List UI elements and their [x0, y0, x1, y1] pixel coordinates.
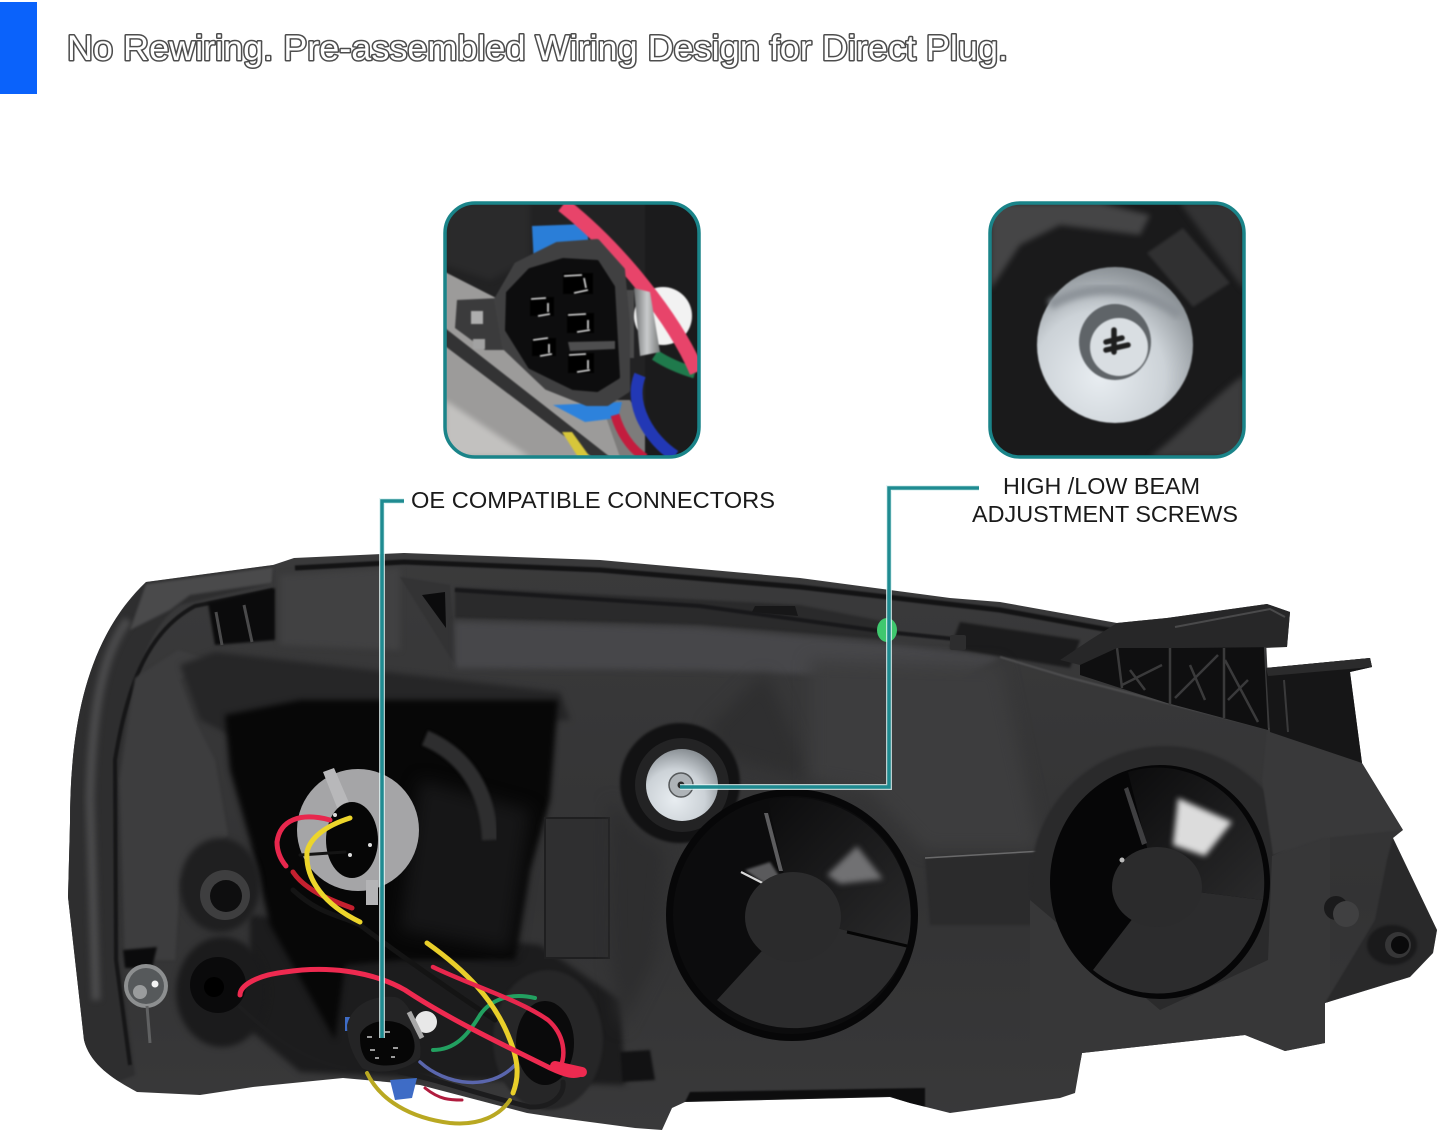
wiring harness: [240, 817, 583, 1123]
key rib: [568, 341, 615, 351]
upper left lighter housing: [990, 203, 1150, 290]
red wire lower: [615, 415, 645, 458]
adjustment screw boss: [620, 723, 740, 843]
harness connector: [345, 997, 437, 1100]
right projector lens: [1050, 765, 1270, 999]
title: No Rewiring. Pre-assembled Wiring Design for Direct Plug.: [67, 29, 1008, 68]
washer top shading: [1050, 290, 1180, 315]
screw recess: [1079, 304, 1151, 380]
dark diagonal band: [445, 328, 610, 457]
upper body highlight: [454, 622, 992, 674]
rear bracket rib: [1284, 680, 1288, 732]
dark block lower-left of lens: [620, 1050, 655, 1082]
blue wire: [637, 375, 675, 456]
green wire: [655, 355, 695, 373]
red socket wire: [277, 817, 330, 866]
pin contact marks: [531, 275, 590, 372]
lower step block: [926, 853, 1032, 924]
interior details clipped to housing: [60, 562, 1437, 1110]
rear bracket top plate: [1266, 658, 1372, 676]
top rail dark edge: [295, 562, 1120, 632]
step edge line: [925, 851, 1042, 858]
long red wire: [240, 969, 583, 1075]
mounting bracket with lattice: [1060, 604, 1372, 763]
connector shell: [497, 242, 627, 403]
callout line: connectors: [382, 501, 404, 1038]
connector side latch: [455, 298, 505, 350]
inner left panel: [123, 674, 226, 958]
slot ribs: [216, 605, 252, 645]
mid shading zone above recess: [180, 652, 568, 731]
clip base: [624, 290, 634, 358]
lower right socket: [493, 970, 603, 1110]
tab beside lens: [1262, 728, 1403, 855]
rectangular lamp plate frame: [545, 818, 609, 958]
left mounting hole: [180, 838, 260, 932]
label: OE compatible connectors: OE COMPATIBLE CONNECTORS: [411, 487, 775, 513]
slot behind rim: [208, 588, 275, 645]
metal clip: [634, 288, 660, 356]
soft image layer: [445, 203, 699, 458]
lattice backing: [1080, 640, 1268, 730]
small rail tab: [950, 635, 966, 650]
black wires: [293, 890, 495, 1020]
headlight assembly: [60, 553, 1437, 1130]
olive loop wire: [367, 1073, 510, 1123]
bolt post on right edge: [1324, 896, 1359, 927]
lower grey highlight: [445, 400, 530, 457]
upper right housing: [1180, 203, 1244, 290]
left projector lens: [666, 789, 918, 1041]
yellow wire tip: [562, 432, 590, 457]
pink-red wire: [563, 205, 697, 372]
right bracket arm: [1147, 228, 1230, 307]
small top tab: [752, 606, 798, 616]
connector pins: [530, 273, 594, 373]
white plug behind: [634, 287, 692, 345]
bracket hood: [1060, 604, 1290, 665]
second red wire: [433, 967, 563, 1068]
adjustment screw washer: [646, 749, 718, 821]
right body panel: [816, 664, 1024, 839]
rim groove: [115, 590, 273, 1065]
dark backdrop: [990, 203, 1244, 457]
arc rib beside bulb: [425, 738, 490, 840]
washer: [1037, 267, 1193, 423]
lower right housing: [1150, 375, 1244, 457]
label: high / low beam adjustment screws: ADJUSTMENT SCREWS: [972, 501, 1238, 527]
connector cavity: [507, 260, 618, 390]
grey strip lower right: [600, 400, 660, 457]
panel border: [990, 203, 1244, 457]
arm fold from screw boss: [727, 692, 781, 750]
housing silhouette: [68, 553, 1437, 1130]
lower recess shading: [250, 915, 625, 1085]
hood light edge: [1175, 609, 1285, 627]
upper lighter block: [284, 574, 396, 646]
upper band dark: [455, 587, 887, 640]
lens collar shadow: [1032, 746, 1273, 1010]
tip section: [1325, 838, 1437, 1003]
tab notch: [422, 592, 446, 628]
screw head: [1090, 318, 1148, 376]
yellow socket wire: [307, 818, 360, 922]
inset panel: connector close-up: [445, 203, 699, 458]
rim highlight: [90, 620, 128, 1000]
blue accent bar: [0, 2, 37, 94]
grey bulb socket: [297, 768, 419, 905]
grey lens surface: [445, 272, 660, 457]
bottom notch: [685, 1088, 926, 1107]
left outer rim: [60, 565, 273, 1085]
lattice ribs: [1117, 645, 1269, 728]
blue clip bottom: [553, 402, 622, 422]
phillips slot: [1106, 330, 1128, 352]
upper edge highlight: [1000, 656, 1270, 729]
green wire: [433, 996, 535, 1050]
callout line: adjustment screws: [680, 488, 979, 787]
panel border: [445, 203, 699, 457]
vent notch: [123, 947, 157, 968]
dark fold near plate: [610, 800, 665, 1030]
right dark area: [645, 203, 699, 457]
rim lip top: [130, 567, 273, 630]
upper left soft shade: [445, 203, 530, 280]
inset panel: adjustment screw close-up: [990, 203, 1244, 457]
black bulb recess: [225, 700, 558, 1040]
blue clip top: [532, 224, 590, 265]
rail below the bracket: [950, 622, 1080, 668]
long yellow wire: [427, 943, 517, 1093]
lower mounting boss: [176, 937, 268, 1047]
label: high / low beam adjustment screws: [972, 473, 1238, 527]
dark backdrop: [446, 204, 646, 408]
dark area right of bulb: [400, 780, 530, 950]
label: high / low beam adjustment screws: HIGH /LOW BEAM: [1003, 473, 1200, 499]
lens lower collar body: [1030, 830, 1330, 1060]
keyed hole on right tip: [1367, 925, 1417, 965]
clear vent plug: [124, 964, 168, 1043]
second rail dark line: [454, 588, 950, 641]
green adjuster marker: [877, 618, 897, 642]
soft image layer: [990, 203, 1244, 457]
dark red wire: [425, 1088, 462, 1100]
inner bezel tab: [400, 577, 457, 668]
rear bracket: [1266, 658, 1372, 763]
dark blue wire: [420, 1062, 515, 1082]
